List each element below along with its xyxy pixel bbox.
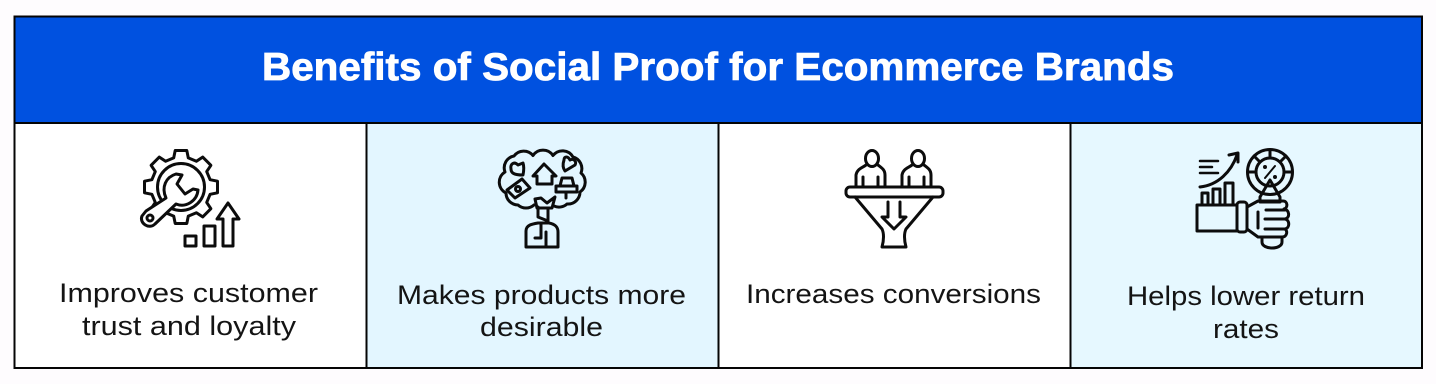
text: improves customer trust: trust and loyalty <box>82 311 297 341</box>
panel: conversions <box>719 124 1070 368</box>
text: makes products more desirable <box>397 280 686 342</box>
panel: desirable products <box>367 124 718 368</box>
icon: hand holding percent bulb with chart <box>1197 150 1292 248</box>
panel: customer trust <box>15 124 366 368</box>
title banner <box>15 16 1422 123</box>
text: makes products more desirable: desirable <box>480 312 603 342</box>
icon: thought cloud with person <box>499 150 585 247</box>
text: increases conversions: Increases conversions <box>746 279 1041 309</box>
text: helps lower return rates <box>1127 281 1365 344</box>
text: improves customer trust: Improves customer <box>59 278 318 308</box>
panel: lower return rates <box>1071 124 1422 368</box>
text: improves customer trust <box>59 278 318 341</box>
text: makes products more desirable: Makes products more <box>397 280 686 310</box>
text: helps lower return rates: rates <box>1213 314 1279 344</box>
text: helps lower return rates: Helps lower return <box>1127 281 1365 311</box>
icon: gear, wrench and rising bars <box>141 150 239 246</box>
icon: people over a funnel <box>846 150 943 247</box>
title: Benefits of Social Proof for Ecommerce Brands <box>262 46 1174 89</box>
